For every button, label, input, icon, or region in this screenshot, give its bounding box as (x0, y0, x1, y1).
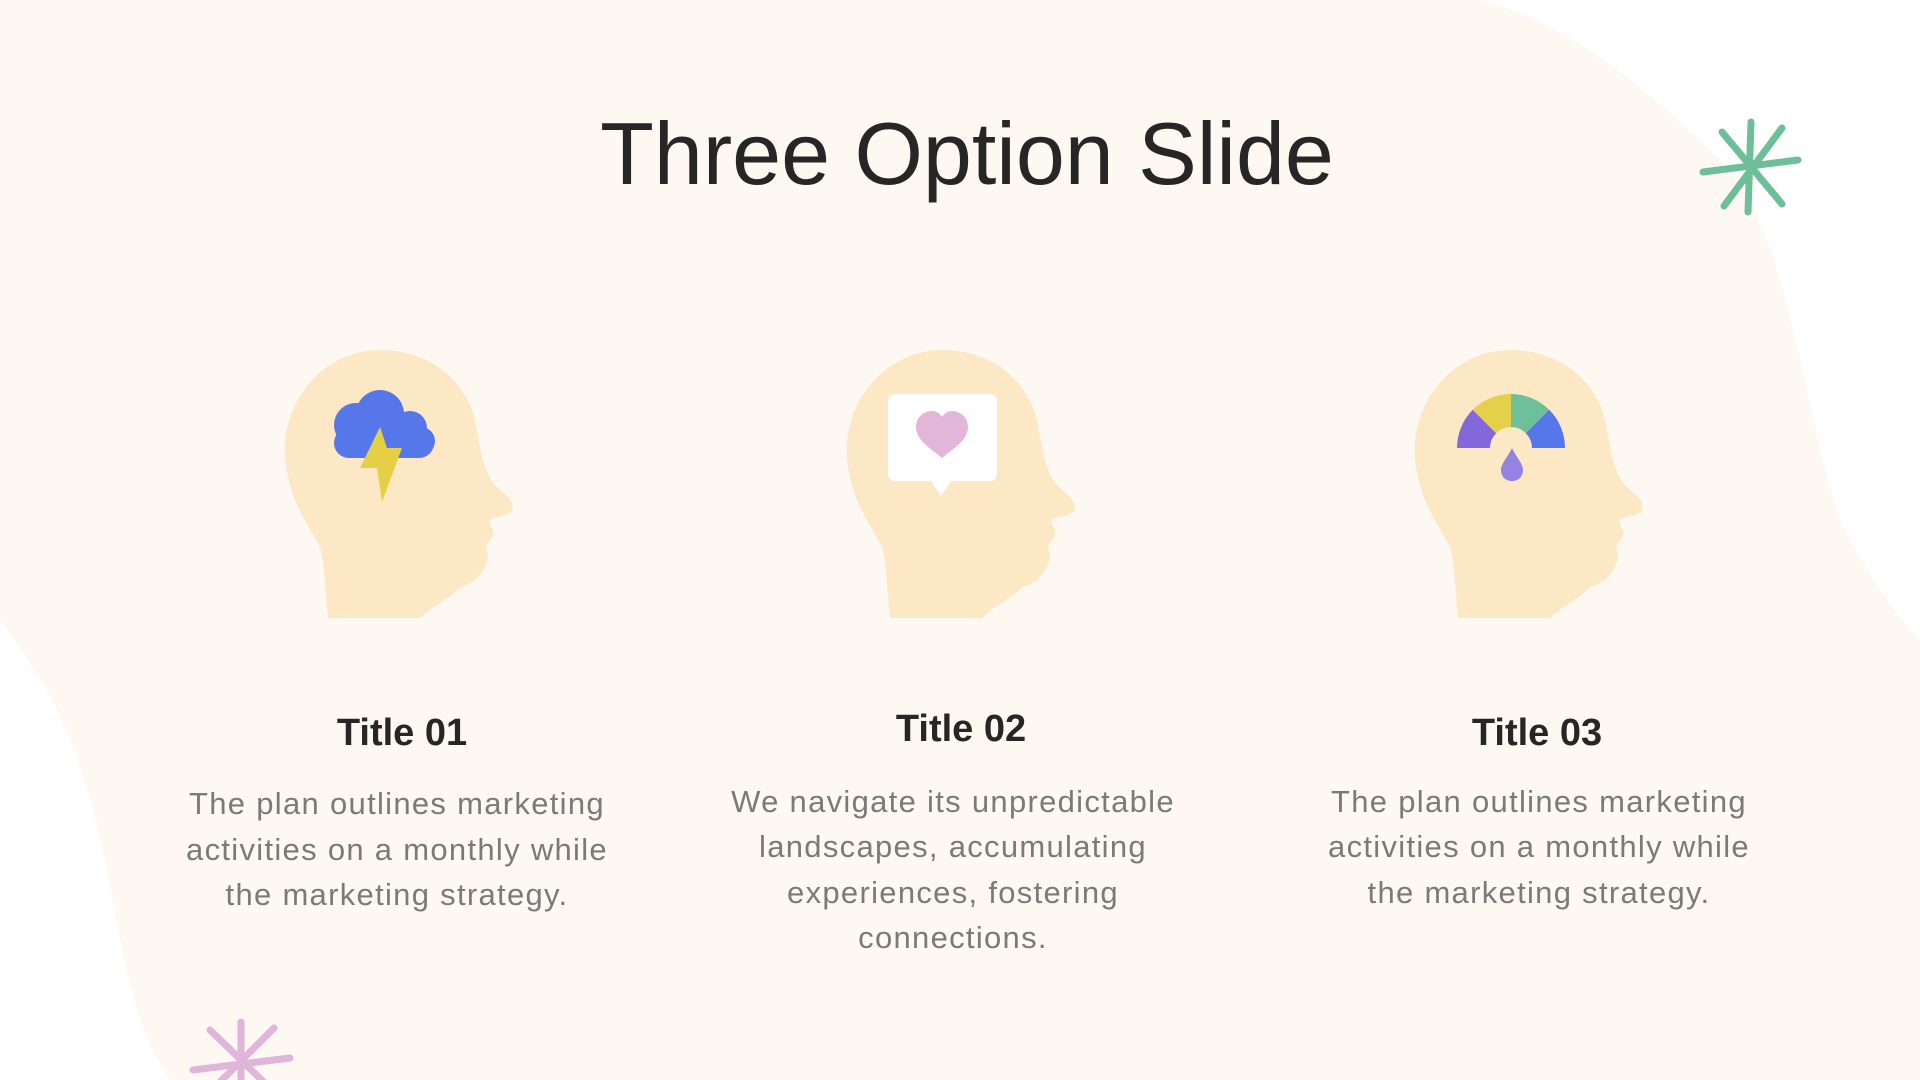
icon: cloud (334, 390, 435, 458)
text block: option 2: connections. (858, 920, 1048, 955)
text block: option 1: activities on a monthly while (186, 832, 608, 867)
text block: option 3: The plan outlines marketing (1331, 784, 1747, 819)
icon: speech bubble (888, 394, 997, 496)
icon: green star (1703, 122, 1798, 212)
text block: option 1: Title 01 (337, 712, 467, 754)
icon: heart (916, 411, 968, 458)
text block: option 3: the marketing strategy. (1368, 875, 1710, 910)
text block: option 3 (1328, 712, 1750, 910)
icon: lightning (360, 427, 402, 502)
text block: option 2: Title 02 (896, 708, 1026, 750)
option 1 head with cloud (285, 350, 513, 618)
text block: option 1 (186, 712, 608, 912)
text block: option 2: landscapes, accumulating (759, 829, 1147, 864)
text block: option 1: The plan outlines marketing (189, 786, 605, 821)
title: Three Option Slide (600, 104, 1334, 203)
text block: option 3: activities on a monthly while (1328, 829, 1750, 864)
text block: option 2: We navigate its unpredictable (731, 784, 1175, 819)
icon: gauge (1457, 394, 1565, 481)
option 3 head with gauge (1415, 350, 1643, 618)
text block: option 2: experiences, fostering (787, 875, 1119, 910)
icon: pink star (193, 1022, 290, 1080)
option 2 head with heart bubble (847, 350, 1075, 618)
text block: option 2 (731, 708, 1175, 955)
text block: option 3: Title 03 (1472, 712, 1602, 754)
text block: option 1: the marketing strategy. (226, 877, 568, 912)
